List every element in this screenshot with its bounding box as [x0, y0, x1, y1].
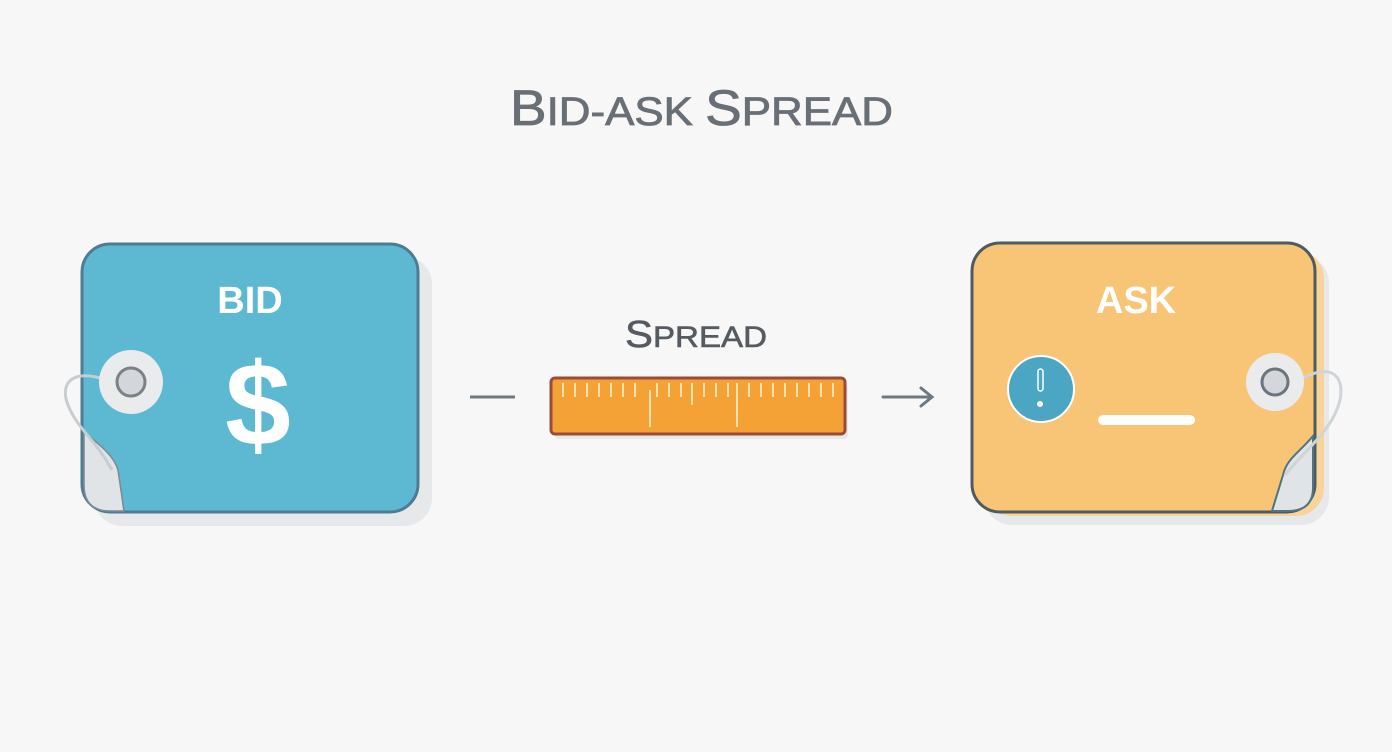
ask string [1285, 372, 1341, 475]
icon: dollar sign: $ [225, 339, 291, 471]
panel: ask tag [972, 243, 1341, 525]
icon: alert circle [1008, 356, 1074, 422]
panel: bid tag [65, 244, 432, 526]
ask corner fold [1272, 436, 1313, 511]
bid label: BID [217, 280, 283, 322]
arrow: right [883, 388, 932, 406]
arrow: left dash [470, 396, 515, 398]
bid corner fold [84, 432, 124, 511]
icon: ruler [551, 378, 848, 439]
bid hole [99, 350, 163, 414]
ask hole [1246, 353, 1304, 411]
spread label: SPREAD [625, 314, 767, 356]
ask price line [1103, 415, 1190, 425]
bid string [65, 376, 112, 470]
title: BID-ASK SPREAD [510, 80, 893, 136]
ask label: ASK [1096, 280, 1177, 322]
